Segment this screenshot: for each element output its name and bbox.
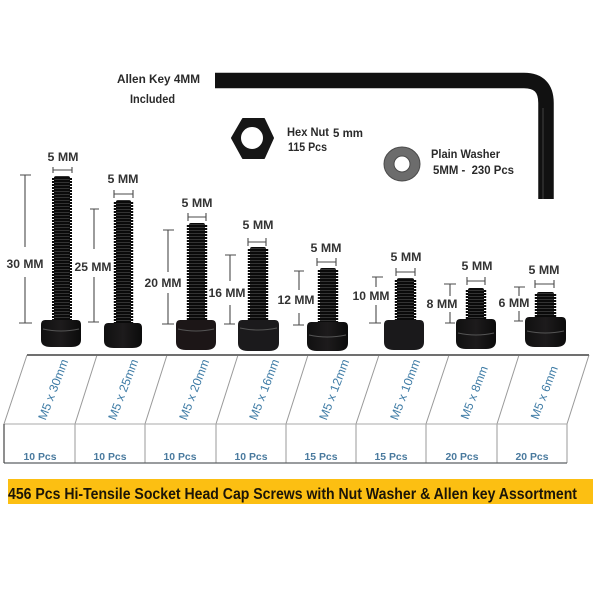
dimension 5 MM, 20 MM: 20 MM [144, 278, 182, 290]
size and quantity table [4, 355, 589, 463]
quantity labels: 15 Pcs [374, 451, 408, 463]
dimension 5 MM, 16 MM: 16 MM [208, 288, 246, 300]
quantity labels: 15 Pcs [304, 451, 338, 463]
dimension 5 MM, 25 MM [74, 174, 138, 322]
icon: hex nut [232, 119, 273, 158]
size labels [35, 357, 561, 422]
dimension 5 MM, 10 MM [352, 252, 422, 323]
dimension 5 MM, 6 MM: 5 MM [528, 265, 560, 277]
screws with dimensions [6, 152, 566, 351]
screw M5 x 30mm [41, 176, 81, 347]
screw M5 x 6mm [525, 292, 566, 347]
quantity labels: 20 Pcs [516, 451, 549, 463]
dimension 5 MM, 30 MM: 5 MM [48, 152, 78, 164]
screw M5 x 20mm [176, 223, 216, 350]
size labels: M5 x 20mm [176, 357, 212, 422]
dimension 5 MM, 30 MM [6, 152, 78, 323]
size labels: M5 x 30mm [35, 357, 71, 422]
hex nut label: Hex Nut [287, 127, 329, 139]
dimension 5 MM, 10 MM: 10 MM [352, 291, 390, 303]
allen key label [117, 74, 200, 106]
quantity labels [24, 451, 549, 463]
dimension 5 MM, 25 MM: 25 MM [74, 262, 112, 274]
hex nut label: 5 mm [333, 128, 363, 140]
dimension 5 MM, 8 MM: 8 MM [426, 299, 458, 311]
plain washer label [431, 149, 514, 177]
quantity labels: 10 Pcs [94, 451, 127, 463]
dimension 5 MM, 25 MM: 5 MM [108, 174, 138, 186]
plain washer label: 5MM - 230 Pcs [433, 165, 514, 177]
icon: plain washer [384, 147, 420, 181]
quantity labels: 10 Pcs [234, 451, 268, 463]
dimension 5 MM, 12 MM [278, 243, 342, 325]
allen key label: Included [130, 94, 175, 106]
size labels: M5 x 16mm [246, 357, 282, 422]
plain washer label: Plain Washer [431, 149, 500, 161]
size labels: M5 x 25mm [105, 357, 141, 422]
dimension 5 MM, 20 MM [144, 198, 212, 324]
dimension 5 MM, 6 MM [498, 265, 560, 321]
screw M5 x 8mm [456, 288, 496, 349]
allen key label: Allen Key 4MM [117, 74, 200, 86]
dimension 5 MM, 16 MM: 5 MM [242, 220, 274, 232]
hex nut label: 115 Pcs [288, 142, 327, 154]
icon: allen key [215, 80, 546, 199]
dimension 5 MM, 12 MM: 5 MM [310, 243, 342, 255]
dimension 5 MM, 6 MM: 6 MM [498, 298, 530, 310]
screw M5 x 10mm [384, 278, 424, 350]
size labels: M5 x 12mm [316, 357, 352, 422]
quantity labels: 10 Pcs [24, 451, 57, 463]
screw M5 x 12mm [307, 268, 348, 351]
size labels: M5 x 6mm [528, 364, 561, 421]
screw M5 x 16mm [238, 247, 279, 351]
quantity labels: 10 Pcs [164, 451, 197, 463]
size labels: M5 x 8mm [458, 364, 491, 421]
dimension 5 MM, 20 MM: 5 MM [182, 198, 212, 210]
title banner [8, 479, 593, 504]
dimension 5 MM, 10 MM: 5 MM [390, 252, 422, 264]
dimension 5 MM, 16 MM [208, 220, 274, 324]
dimension 5 MM, 8 MM [426, 261, 492, 323]
size labels: M5 x 10mm [387, 357, 423, 422]
dimension 5 MM, 12 MM: 12 MM [278, 295, 314, 307]
screw M5 x 25mm [104, 200, 142, 348]
dimension 5 MM, 30 MM: 30 MM [6, 259, 44, 271]
dimension 5 MM, 8 MM: 5 MM [462, 261, 492, 273]
hex nut label [287, 127, 363, 154]
quantity labels: 20 Pcs [446, 451, 479, 463]
